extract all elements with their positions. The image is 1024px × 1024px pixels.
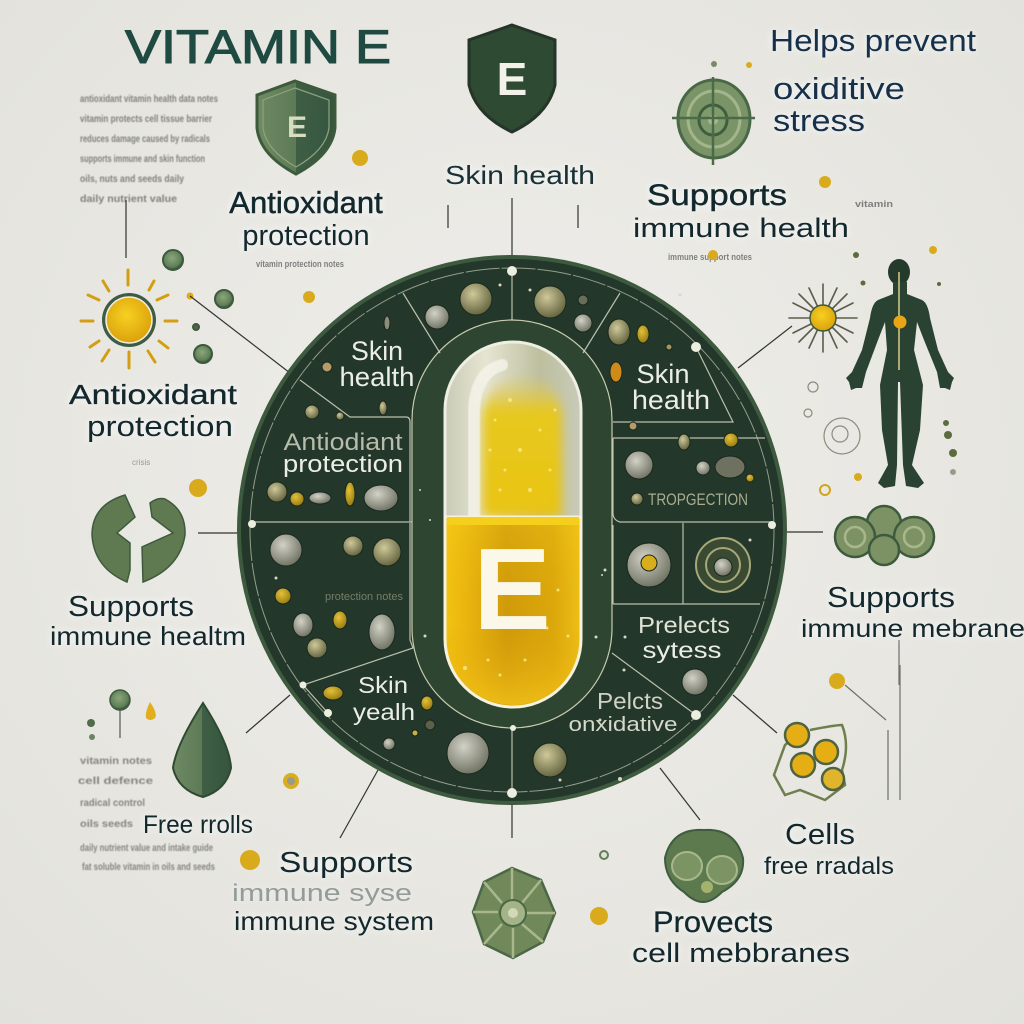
specks — [274, 284, 752, 782]
heading: supports immune health left: immune healtm — [50, 621, 246, 651]
icon: balloon drop small — [87, 690, 156, 740]
heading: supports immune health: Supports — [647, 179, 787, 212]
panel labels: health — [340, 362, 414, 392]
heading: supports immune system: immune system — [234, 906, 434, 936]
heading: helps prevent: oxiditive — [773, 71, 905, 106]
icon: shield top — [469, 25, 555, 132]
panel labels: protection notes — [325, 591, 403, 603]
icon: bottom right cell — [665, 830, 743, 902]
heading: supports immune system: Supports — [279, 847, 413, 879]
heading: supports immune mebrane: immune mebrane — [801, 615, 1024, 643]
heading: supports immune mebrane: Supports — [827, 582, 955, 614]
text block: bottom left small print: radical control — [80, 798, 145, 809]
icon: shield top: E — [497, 53, 527, 105]
panel labels: yealh — [353, 699, 415, 725]
panel objects: top left — [267, 283, 492, 511]
icon: cell group right — [835, 506, 934, 565]
heading: supports immune health — [633, 179, 849, 243]
heading: helps prevent: stress — [773, 103, 865, 138]
icon: molecule cluster — [774, 723, 846, 800]
icon: sunburst right — [789, 284, 857, 352]
panel labels: Skin — [351, 336, 403, 366]
caption: right small: vitamin — [855, 199, 893, 209]
text block: top left small print: antioxidant vitamin health data notes — [80, 94, 218, 105]
panel labels: Skin — [358, 672, 408, 698]
panel labels: Skin — [636, 359, 690, 389]
capsule sparkles — [463, 398, 570, 676]
panel dividers — [250, 268, 774, 793]
heading: provects cell membranes: Provects — [653, 906, 773, 939]
text block: top left small print: reduces damage caused by radicals — [80, 134, 210, 145]
caption faint: crisis — [132, 458, 150, 467]
panel objects: bottom right — [533, 538, 750, 777]
connector lines — [126, 198, 823, 838]
icon: ring dot — [600, 851, 608, 859]
heading: supports immune health left — [50, 591, 246, 651]
title: VITAMIN E — [125, 20, 391, 73]
heading: antioxidant protection left — [69, 379, 237, 443]
text block: top left small print: oils, nuts and seeds daily — [80, 174, 184, 185]
icon: dot — [352, 150, 368, 166]
heading: supports immune system — [232, 847, 434, 936]
panel labels — [283, 336, 748, 736]
heading: provects cell membranes: cell mebbranes — [632, 938, 850, 968]
heading: supports immune health left: Supports — [68, 591, 194, 623]
heading: cells free radicals: free rradals — [764, 853, 894, 880]
text block: bottom left small print: vitamin notes — [80, 756, 152, 767]
capsule letter: E — [473, 524, 551, 654]
decorative dots — [189, 62, 937, 925]
icon: shield left — [257, 81, 335, 174]
panel labels: health — [632, 385, 710, 415]
heading: helps prevent: Helps prevent — [770, 23, 976, 58]
text block: top left small print: supports immune and skin function — [80, 154, 205, 165]
capsule — [445, 342, 581, 707]
heading: antioxidant protection left: Antioxidant — [69, 379, 237, 410]
text block: bottom left small print: oils seeds — [80, 819, 133, 830]
panel labels: protection — [283, 451, 403, 478]
panel objects: bottom left — [270, 534, 489, 774]
heading: supports immune health: immune health — [633, 213, 849, 243]
text block: bottom left small print: cell defence — [78, 776, 154, 787]
panel labels: TROPGECTION — [648, 490, 748, 509]
caption: immune small: immune support notes — [668, 252, 752, 262]
text block: top left small print: vitamin protects cell tissue barrier — [80, 114, 212, 125]
caption small: vitamin protection notes — [256, 259, 344, 269]
icon: shield left: E — [287, 111, 307, 144]
panel labels: Antiodiant — [284, 429, 403, 456]
panel labels: Pelcts — [597, 688, 663, 714]
panel labels: onxidative — [568, 714, 678, 736]
small specks around figure — [853, 252, 957, 475]
icon: human figure — [846, 259, 954, 488]
panel objects: top right — [534, 286, 754, 505]
text block: top left small print — [80, 94, 218, 205]
icon: top right cell — [672, 61, 755, 165]
text block: bottom left small print: fat soluble vitamin in oils and seeds — [82, 862, 215, 873]
icon: split sphere — [92, 495, 185, 582]
panel labels: Prelects — [638, 612, 730, 638]
heading: antioxidant protection top: protection — [242, 220, 370, 252]
text block: bottom left small print: daily nutrient value and intake guide — [80, 843, 213, 854]
text block: top left small print: daily nutrient value — [80, 194, 177, 205]
heading: skin health top: Skin health — [445, 160, 595, 190]
panel joints — [248, 266, 776, 798]
icon: swirl cell near figure — [804, 382, 860, 495]
heading: provects cell membranes — [632, 906, 850, 968]
heading: antioxidant protection left: protection — [87, 411, 233, 443]
heading: supports immune system: immune syse — [232, 880, 412, 907]
icon: sun — [81, 270, 177, 368]
capsule surround — [412, 320, 612, 728]
icon: bottom emblem — [473, 868, 555, 958]
thin lines lower right — [845, 640, 900, 800]
text block: bottom left small print — [78, 756, 215, 873]
panel labels: sytess — [642, 637, 722, 663]
heading: cells free radicals — [764, 819, 894, 880]
heading: antioxidant protection top — [229, 185, 383, 252]
heading: helps prevent — [770, 23, 976, 138]
heading: supports immune mebrane — [801, 582, 1024, 643]
heading: antioxidant protection top: Antioxidant — [229, 185, 383, 220]
icon: leaf drop — [173, 703, 231, 797]
icons: small cells left — [163, 250, 233, 363]
heading: cells free radicals: Cells — [785, 819, 855, 851]
infographic disc — [239, 257, 785, 803]
icon: gold ring dot — [283, 773, 299, 789]
heading: free rolls: Free rrolls — [143, 811, 253, 839]
